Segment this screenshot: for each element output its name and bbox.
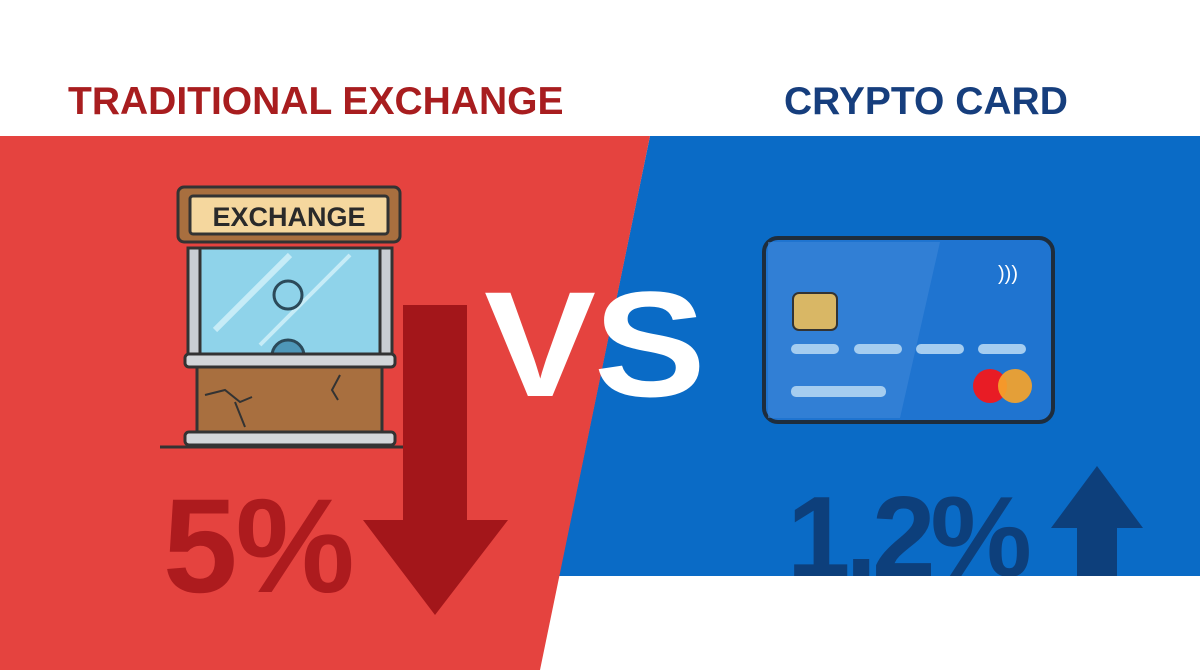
icon: exchange booth	[160, 186, 403, 448]
title: crypto card: CRYPTO CARD	[784, 80, 1068, 123]
icon: exchange booth: EXCHANGE	[212, 202, 366, 232]
icon: crypto card: )))	[998, 263, 1018, 285]
vs text: VS	[484, 260, 704, 428]
stat: 5%: 5%	[163, 472, 353, 621]
title: traditional exchange: TRADITIONAL EXCHANGE	[68, 80, 563, 123]
icon: crypto card	[762, 236, 1055, 424]
arrow: up	[1051, 466, 1143, 576]
arrow: down	[363, 305, 508, 615]
